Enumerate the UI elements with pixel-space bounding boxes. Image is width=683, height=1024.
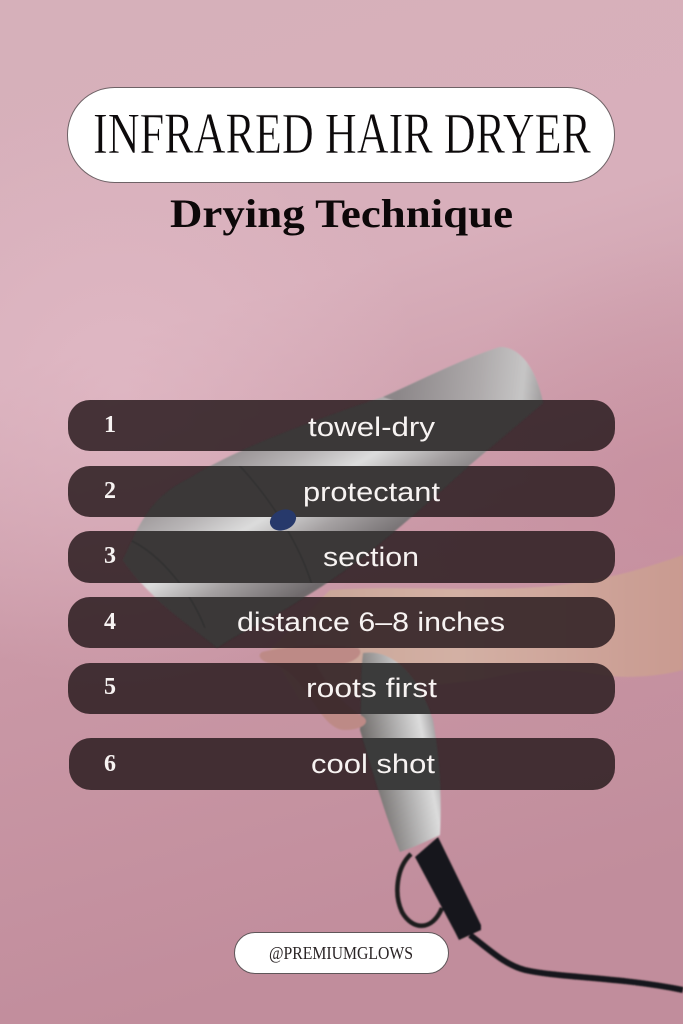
step 4: distance 6–8 inches — [237, 607, 505, 637]
step 1: towel-dry — [308, 412, 436, 442]
photo: hand holding hair dryer — [123, 347, 683, 990]
dryer nozzle — [383, 347, 543, 403]
step 5: 5 — [104, 674, 116, 700]
dryer button — [267, 506, 299, 534]
step 6: 6 — [104, 751, 116, 777]
dryer seen through bars — [131, 400, 542, 790]
arm — [270, 555, 683, 700]
step 3: 3 — [104, 543, 116, 569]
handle badge — [234, 932, 448, 974]
step 5 — [104, 673, 438, 703]
step 2: protectant — [303, 477, 441, 507]
step 3: section — [323, 542, 419, 572]
step list — [104, 412, 505, 779]
step 2: 2 — [104, 478, 116, 504]
dryer body — [123, 347, 543, 648]
power cord — [470, 935, 683, 990]
title pill — [68, 88, 614, 182]
handle badge: @PREMIUMGLOWS — [269, 943, 413, 963]
step 4 — [104, 607, 505, 637]
fingers — [260, 645, 366, 730]
step 5: roots first — [306, 673, 438, 703]
step 4: 4 — [104, 609, 116, 635]
step bars — [68, 400, 615, 790]
step 1 — [104, 412, 436, 442]
step 3 — [104, 542, 419, 572]
step 1: 1 — [104, 412, 116, 438]
dryer handle — [360, 652, 441, 852]
step 6 — [104, 749, 436, 779]
cord loop — [397, 854, 442, 926]
subtitle: Drying Technique — [170, 191, 513, 236]
cord boot — [415, 837, 481, 940]
step 6: cool shot — [311, 749, 436, 779]
step 2 — [104, 477, 441, 507]
